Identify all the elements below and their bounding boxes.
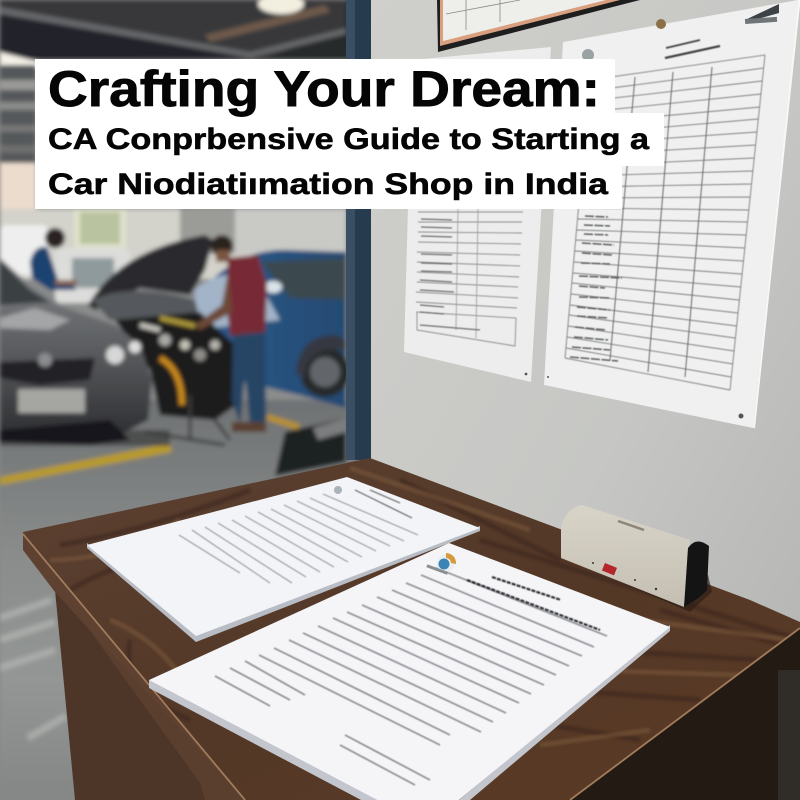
framed chart on wall	[437, 0, 640, 52]
man in red shirt	[195, 235, 267, 432]
desk body	[23, 532, 800, 800]
blue car	[195, 250, 350, 408]
yellow floor markings	[0, 414, 300, 485]
title block	[35, 59, 664, 209]
grey car	[0, 258, 152, 445]
poster: right checklist table	[544, 0, 800, 428]
title backing panels	[35, 59, 664, 209]
bright band and slats at left	[0, 52, 40, 209]
device on desk	[561, 505, 712, 612]
back wall	[0, 209, 346, 303]
man in blue shirt	[30, 228, 77, 290]
floor highlights	[0, 600, 66, 738]
document stack: front	[149, 543, 670, 800]
wall	[371, 0, 800, 800]
title line 1: Crafting Your Dream:	[48, 61, 600, 117]
ceiling	[0, 0, 372, 60]
pin and logo	[656, 19, 666, 29]
document stack: back	[87, 477, 480, 642]
floor	[0, 400, 372, 800]
desk top	[23, 458, 800, 800]
poster: left checklist	[404, 47, 551, 382]
title line 3: Car Niodiatiımation Shop in India	[48, 168, 608, 201]
logo on document	[426, 553, 456, 575]
wood grain	[50, 468, 800, 745]
background: garage workshop	[0, 0, 372, 800]
dark chair near pillar	[275, 418, 346, 476]
title line 2: CA Conprbensive Guide to Starting a	[48, 123, 649, 156]
wood rim highlights	[23, 534, 800, 800]
table grid	[565, 40, 765, 390]
open hood and engine	[88, 235, 243, 445]
pillar	[346, 0, 371, 460]
